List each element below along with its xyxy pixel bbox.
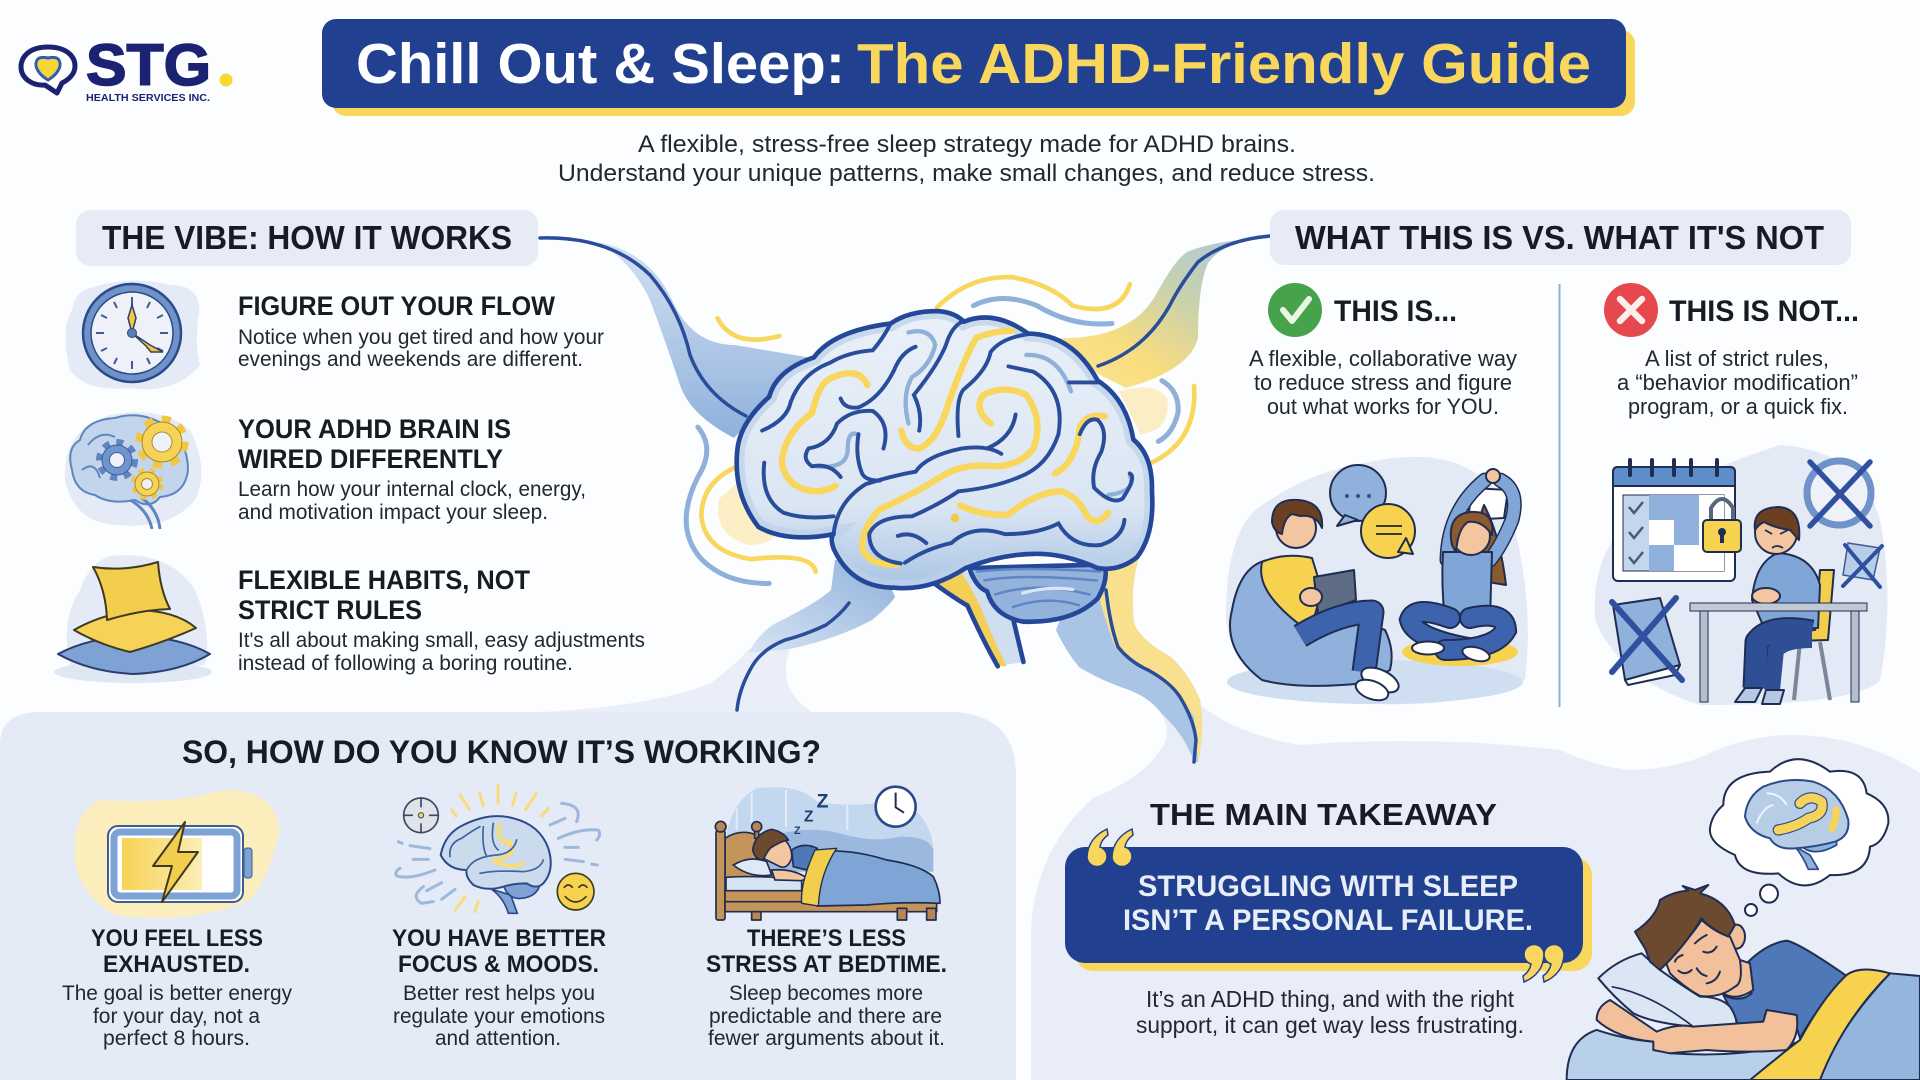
shirt [1723, 941, 1850, 1038]
text: better focus: Better rest helps you [403, 982, 595, 1005]
text: flexible habits: It's all about making small, easy adjustments [238, 629, 645, 652]
text: better focus: and attention. [435, 1027, 561, 1050]
text: less exhausted [62, 925, 292, 1050]
icon: clock [65, 281, 200, 389]
tablet [1314, 570, 1356, 614]
sleeper arm [772, 870, 807, 881]
sleeping head [1635, 885, 1753, 997]
dark folds [762, 322, 1132, 563]
wall clock [876, 787, 916, 827]
text: less stress: THERE’S LESS [747, 925, 906, 952]
illustration: strict rules [1595, 445, 1888, 705]
text: takeaway body: It’s an ADHD thing, and with the right [1146, 986, 1515, 1012]
title banner: Chill Out & Sleep: [356, 32, 845, 96]
column: this is [1249, 283, 1517, 419]
icon: speech bubble heart [21, 47, 75, 93]
text: flexible habits: FLEXIBLE HABITS, NOT [238, 565, 530, 595]
text: takeaway body: support, it can get way less frustrating. [1136, 1012, 1524, 1038]
ribbon: upper left [540, 238, 812, 438]
text: flexible habits: instead of following a boring routine. [238, 652, 573, 675]
panel: how do you know it's working background [0, 712, 1016, 1080]
text: better focus: FOCUS & MOODS. [398, 951, 599, 978]
column: this is: A flexible, collaborative way [1249, 346, 1517, 371]
crossed big book [1612, 598, 1682, 685]
light rays [452, 785, 548, 912]
boy legs [1300, 612, 1372, 672]
text: better focus: regulate your emotions [393, 1005, 605, 1028]
chair [1765, 570, 1834, 700]
icon: stacked pillows [54, 555, 212, 683]
column: this is: to reduce stress and figure [1254, 370, 1512, 395]
logo: HEALTH SERVICES INC. [86, 92, 210, 104]
callout: quote box [1065, 829, 1592, 982]
text: better focus: YOU HAVE BETTER [392, 925, 606, 952]
shirt [792, 845, 817, 870]
background blob [1595, 445, 1888, 705]
icon: brain focus and mood [396, 785, 600, 913]
motion swooshes [396, 803, 600, 903]
icon: close quote [1523, 944, 1564, 982]
main brain illustration [686, 277, 1194, 666]
divider [1558, 284, 1560, 707]
text: less exhausted: EXHAUSTED. [103, 951, 250, 978]
sleeper head [753, 829, 792, 867]
blanket stripe [801, 848, 837, 906]
text: less stress: predictable and there are [709, 1005, 942, 1028]
swirls around brain [686, 277, 1194, 583]
column: this is not: a “behavior modification” [1617, 370, 1858, 395]
mattress [726, 877, 802, 891]
text: your adhd brain: and motivation impact your sleep. [238, 501, 548, 524]
heading: the vibe [76, 210, 538, 266]
stem [492, 889, 517, 913]
text: less stress: Sleep becomes more [729, 982, 923, 1005]
calendar [1613, 460, 1735, 581]
icon: open quote [1087, 829, 1133, 867]
cerebellum [969, 565, 1106, 622]
desk legs [1700, 611, 1859, 702]
smiley [557, 873, 594, 910]
icon: red cross [1604, 283, 1658, 337]
snoring letters: Z [794, 825, 801, 837]
text: less stress: fewer arguments about it. [708, 1027, 945, 1050]
target [404, 798, 438, 833]
brain contour line [737, 311, 1152, 588]
brain stem [935, 570, 1023, 666]
blanket over body [1820, 973, 1920, 1080]
speech bubbles [1330, 465, 1415, 558]
snoring letters: Z [817, 791, 829, 812]
heading: the main takeaway: THE MAIN TAKEAWAY [1150, 797, 1497, 832]
title banner: The ADHD-Friendly Guide [857, 32, 1591, 96]
text: your adhd brain: YOUR ADHD BRAIN IS [238, 414, 511, 444]
ribbon: lower left [737, 560, 895, 710]
thought bubble [1710, 759, 1888, 916]
column: this is: THIS IS... [1334, 295, 1457, 328]
icon: brain with gears [65, 412, 201, 529]
blanket [817, 851, 940, 906]
brain shading [737, 311, 1152, 588]
heading: so how do you know: SO, HOW DO YOU KNOW IT’S WORKING? [182, 734, 821, 770]
crossed clock [1807, 461, 1871, 526]
text: flexible habits [238, 565, 645, 675]
crossed small book [1843, 543, 1882, 587]
column: this is: out what works for YOU. [1267, 394, 1499, 419]
snoring letters: Z [804, 809, 813, 826]
padlock [1703, 499, 1741, 552]
blanket under arm [1567, 1030, 1800, 1080]
column: this is not: THIS IS NOT... [1669, 295, 1859, 328]
heading: what this is vs what it's not: WHAT THIS IS VS. WHAT IT'S NOT [1295, 219, 1824, 256]
callout: quote box: STRUGGLING WITH SLEEP [1138, 870, 1518, 903]
brain [441, 816, 551, 889]
frustrated boy [1735, 507, 1820, 704]
pillow [733, 859, 772, 876]
ribbon: upper right [1051, 236, 1270, 388]
text: your adhd brain [238, 414, 586, 524]
boy on beanbag [1261, 500, 1402, 704]
text: your adhd brain: Learn how your internal clock, energy, [238, 478, 586, 501]
text: less exhausted: perfect 8 hours. [103, 1027, 250, 1050]
illustration: relaxed teens [1226, 457, 1528, 704]
logo: STG [86, 33, 211, 98]
text: figure out your flow [238, 291, 604, 371]
column: this is not: program, or a quick fix. [1628, 394, 1848, 419]
illustration: sleeping boy dreaming [1567, 759, 1920, 1080]
logo [21, 33, 232, 104]
text: your adhd brain: WIRED DIFFERENTLY [238, 444, 503, 474]
text: figure out your flow: evenings and weekends are different. [238, 348, 583, 371]
text: less exhausted: The goal is better energy [62, 982, 292, 1005]
text: less stress [706, 925, 947, 1050]
text: less exhausted: YOU FEEL LESS [91, 925, 263, 952]
subtitle: A flexible, stress-free sleep strategy made for ADHD brains. [638, 131, 1296, 158]
blanket stripe [1750, 970, 1890, 1080]
text: figure out your flow: FIGURE OUT YOUR FLOW [238, 291, 555, 321]
text: figure out your flow: Notice when you get tired and how your [238, 326, 604, 349]
ribbon: lower right [1056, 560, 1202, 762]
arm and hands [1597, 1000, 1797, 1053]
bed frame [715, 821, 937, 920]
heading: what this is vs what it's not [1270, 210, 1851, 265]
beanbag [1230, 560, 1392, 686]
icon: sleeping in bed [715, 787, 940, 920]
text: flexible habits: STRICT RULES [238, 595, 422, 625]
icon: battery [74, 790, 280, 918]
callout: quote box: ISN’T A PERSONAL FAILURE. [1123, 904, 1533, 937]
room backdrop [727, 787, 933, 872]
girl stretching [1402, 469, 1518, 666]
text: takeaway body [1136, 986, 1524, 1038]
background blob: left [480, 650, 815, 714]
cerebellum [503, 882, 541, 898]
brain outline [737, 311, 1152, 588]
pillow [1598, 953, 1737, 1027]
background blob [1226, 457, 1528, 704]
text: less stress: STRESS AT BEDTIME. [706, 951, 947, 978]
snoring letters [794, 791, 829, 837]
subtitle: Understand your unique patterns, make small changes, and reduce stress. [558, 160, 1375, 187]
subtitle [558, 131, 1375, 187]
dream brain [1745, 780, 1848, 869]
light blue folds [816, 331, 1131, 495]
text: less exhausted: for your day, not a [93, 1005, 260, 1028]
yellow folds [782, 331, 1108, 565]
panel: takeaway background [1031, 695, 1920, 1080]
title banner [322, 19, 1635, 116]
text: better focus [392, 925, 606, 1050]
icon: green check [1268, 283, 1322, 337]
column: this is not: A list of strict rules, [1645, 346, 1829, 371]
heading: the vibe: THE VIBE: HOW IT WORKS [102, 219, 512, 256]
column: this is not [1604, 283, 1859, 419]
